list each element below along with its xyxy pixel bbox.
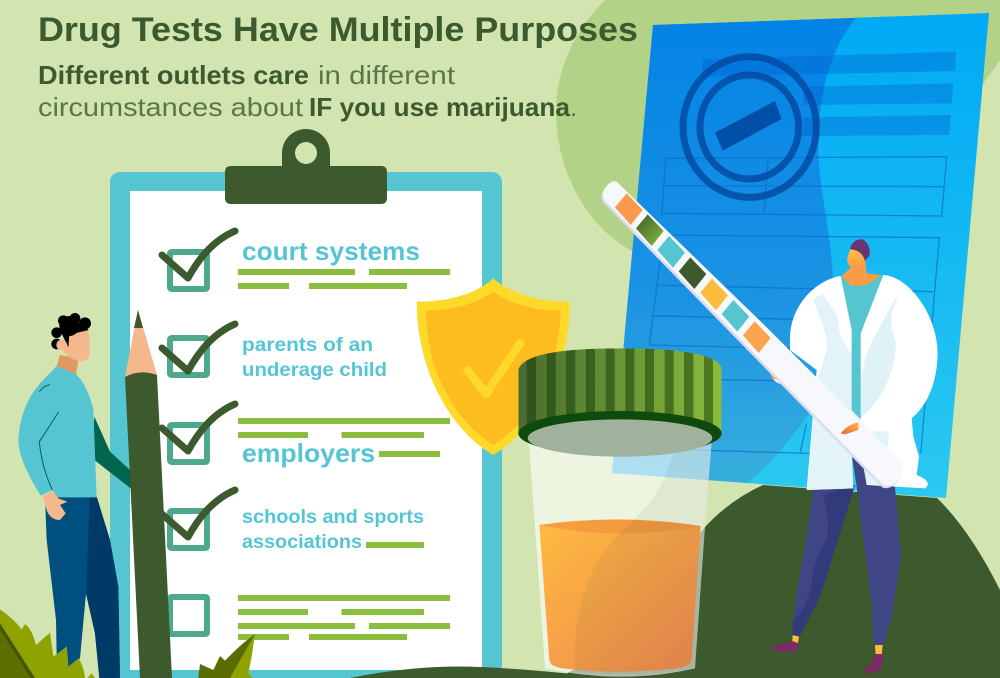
- upper form table: [662, 157, 947, 216]
- far arm: [92, 417, 131, 488]
- green hill bottom: [350, 666, 610, 678]
- subtitle: IF you use marijuana: [309, 92, 571, 122]
- title: Drug Tests Have Multiple Purposes: [38, 11, 638, 49]
- item: court systems: [238, 236, 450, 289]
- shoes and socks: [770, 635, 883, 673]
- plant left: [0, 609, 95, 678]
- item: court systems: court systems: [242, 236, 420, 266]
- background green blob: [556, 0, 1000, 251]
- subtitle: circumstances about: [38, 92, 304, 122]
- neck and head: [842, 239, 881, 286]
- liquid: [539, 519, 701, 672]
- item: schools and sports associations: associations: [242, 531, 362, 553]
- item: parents of an underage child: parents of an: [242, 334, 373, 356]
- subtitle: in different: [318, 60, 456, 90]
- hand: [43, 491, 67, 520]
- lab coat: [790, 275, 938, 490]
- clipboard paper: [130, 191, 482, 670]
- item: schools and sports associations: [242, 506, 424, 553]
- item: schools and sports associations: schools and sports: [242, 506, 424, 528]
- doctor in lab coat holding test strip: [602, 181, 938, 673]
- trousers: [792, 453, 901, 646]
- head: [51, 313, 91, 361]
- shield with check, urine sample cup: [417, 278, 722, 677]
- item: parents of an underage child: [242, 334, 387, 381]
- checkbox 1 with check: [162, 231, 235, 289]
- front hand: [841, 422, 858, 434]
- sweater: [18, 366, 97, 497]
- glass reflection: [575, 420, 712, 674]
- cup body: [528, 433, 712, 677]
- checkbox 5 empty: [170, 597, 207, 634]
- person holding pencil: [18, 313, 131, 678]
- subtitle: .: [570, 92, 577, 122]
- green hill right: [560, 485, 1000, 678]
- item: employers: employers: [242, 438, 375, 468]
- neck: [57, 355, 79, 375]
- blue test report document: [612, 13, 989, 498]
- item: placeholder lines: [238, 595, 450, 640]
- trousers: [45, 497, 120, 678]
- header bars: [702, 52, 956, 136]
- back hand: [770, 370, 787, 385]
- test strip: [602, 181, 903, 488]
- lid: [518, 347, 722, 457]
- checkbox 4 with check: [162, 490, 235, 548]
- checkbox 3 with check: [162, 404, 235, 462]
- subtitle: [38, 60, 577, 122]
- clipboard board: [110, 172, 502, 678]
- plant right: [198, 634, 255, 678]
- clipboard clip: [225, 129, 387, 204]
- clipboard: [110, 129, 502, 678]
- shirt: [841, 275, 883, 419]
- item: employers: [238, 418, 450, 468]
- shield: [417, 278, 570, 455]
- subtitle: Different outlets care: [38, 60, 309, 90]
- item: parents of an underage child: underage child: [242, 359, 387, 381]
- stamp: [683, 57, 816, 197]
- pencil: [125, 310, 172, 678]
- lower form table: [640, 235, 939, 457]
- checkbox 2 with check: [162, 324, 235, 375]
